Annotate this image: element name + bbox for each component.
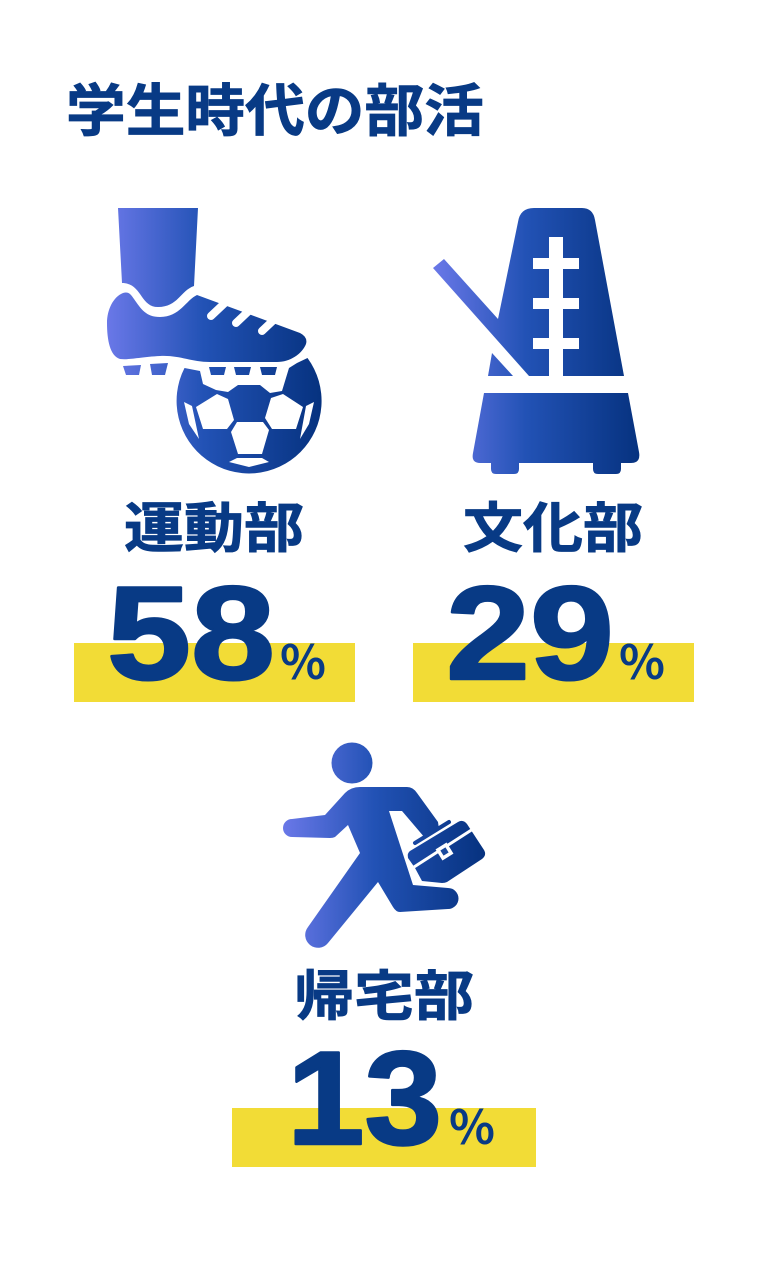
value: 13%: % bbox=[449, 1089, 495, 1158]
metronome lower wedge bbox=[488, 353, 513, 376]
icon: soccer boot on ball bbox=[107, 208, 322, 473]
laces bbox=[211, 300, 280, 331]
value: 29%: 29 bbox=[446, 560, 614, 708]
highlight bar 58 bbox=[74, 643, 355, 702]
briefcase handle bbox=[415, 822, 449, 843]
value: 58%: 58 bbox=[107, 560, 275, 708]
boot bbox=[107, 292, 306, 362]
metronome base bbox=[473, 393, 639, 474]
title: 学生時代の部活 bbox=[66, 80, 484, 143]
value: 58%: % bbox=[280, 624, 326, 693]
highlight bar 29 bbox=[413, 643, 694, 702]
body bbox=[283, 787, 458, 948]
briefcase buckle bbox=[436, 843, 453, 860]
icon: metronome bbox=[433, 208, 639, 474]
value: 58% bbox=[107, 560, 326, 708]
briefcase bbox=[408, 821, 485, 883]
label: 運動部: 運動部 bbox=[124, 499, 304, 559]
leg bbox=[118, 208, 198, 307]
value: 29% bbox=[446, 560, 665, 708]
icon: running commuter with briefcase bbox=[283, 742, 485, 948]
label: 文化部: 文化部 bbox=[463, 499, 643, 559]
metronome body and arm bbox=[433, 208, 624, 376]
value: 13%: 13 bbox=[287, 1025, 442, 1173]
label: 帰宅部: 帰宅部 bbox=[294, 967, 474, 1027]
ball bbox=[177, 358, 322, 473]
ball panels bbox=[184, 394, 314, 467]
cleats bbox=[123, 363, 277, 375]
briefcase strap bbox=[414, 829, 473, 867]
head bbox=[332, 742, 372, 784]
value: 29%: % bbox=[619, 624, 665, 693]
highlight bar 13 bbox=[232, 1108, 536, 1167]
